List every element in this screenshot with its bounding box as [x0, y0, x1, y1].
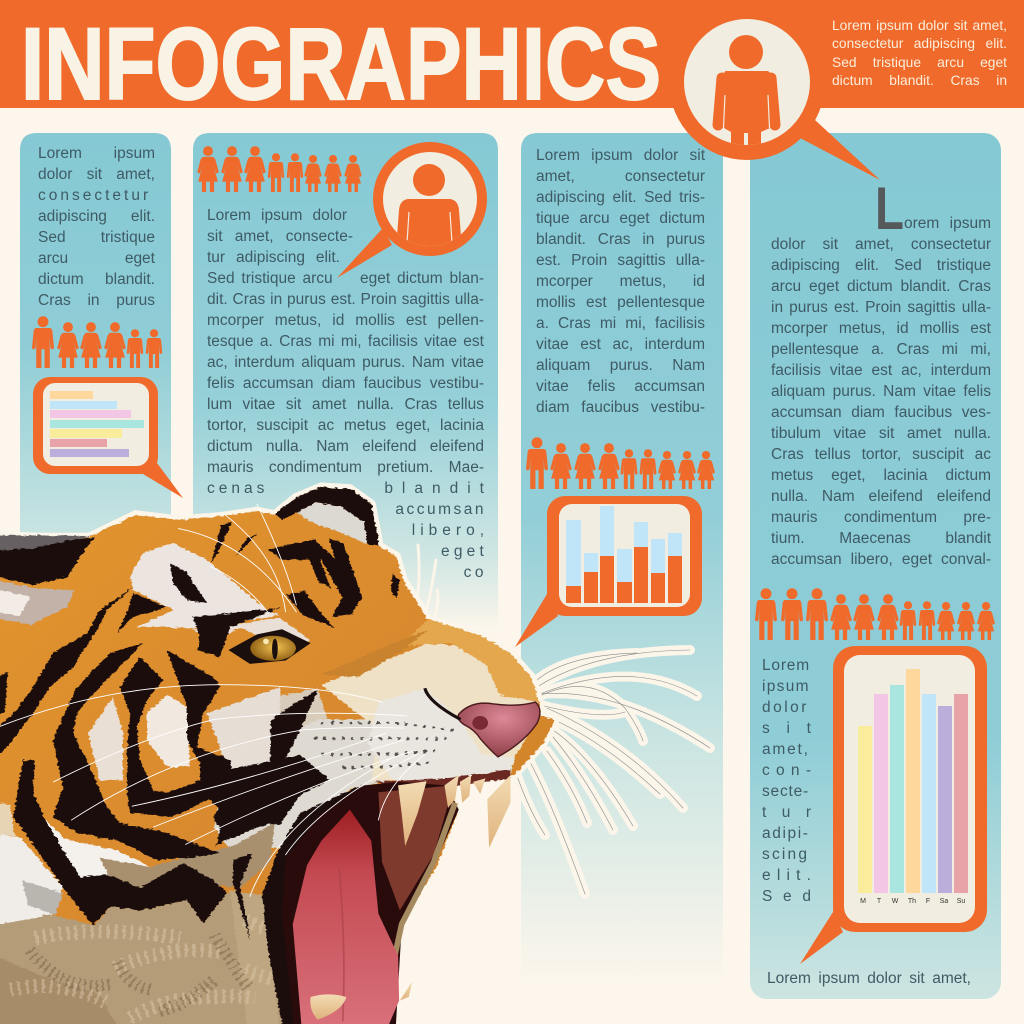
black face stripes — [0, 563, 362, 1024]
text block: second column: tesque a. Cras mi mi, facilisis vitae est — [207, 333, 484, 350]
text block: narrow column beside chart: t u r — [762, 804, 811, 821]
text block: third column: vitae est ac, interdum — [536, 336, 705, 353]
text block: third column: adipiscing elit. Sed tris- — [536, 189, 705, 206]
text block: third column: a. Cras mi mi, facilisis — [536, 315, 705, 332]
text block: second column: dictum nulla. Nam eleifend eleifend — [207, 438, 484, 455]
muzzle — [321, 643, 537, 785]
text block: fourth column: mauris condimentum pre- — [771, 509, 991, 526]
text block: fourth column: mcorper metus, id mollis est — [771, 320, 991, 337]
chart: stacked bars in speech bubble — [515, 496, 702, 647]
header band — [0, 0, 1024, 108]
text line: bottom of fourth column: Lorem ipsum dolor sit amet, — [767, 970, 971, 987]
text block: second column: Lorem ipsum dolor — [207, 207, 347, 224]
text block: fourth column: accumsan diam faucibus ves- — [771, 404, 991, 421]
text block: narrow column beside chart: Lorem — [762, 657, 810, 674]
text block: second column: tortor, suscipit ac metus eget, lacinia — [207, 417, 484, 434]
forehead stripes — [211, 522, 400, 627]
text block: narrow column beside chart: secte- — [762, 783, 809, 800]
cheek white patches — [88, 697, 123, 780]
text block: fourth column: dolor sit amet, consectetur — [771, 236, 991, 253]
text block: second column: felis accumsan diam faucibus vestibu- — [207, 375, 484, 392]
ear right — [275, 487, 379, 546]
text block: narrow column beside chart — [762, 657, 811, 905]
chart: weekly bars in speech bubble: Sa — [940, 898, 948, 905]
text block: fourth column — [771, 215, 991, 568]
text block: second column: mauris condimentum pretium. Mae- — [207, 459, 484, 476]
chart: weekly bars in speech bubble: T — [877, 898, 882, 905]
text block: second column: dit. Cras in purus est. Proin sagittis ulla- — [207, 291, 484, 308]
panel: fourth column — [750, 133, 1001, 999]
face whiskers — [0, 504, 425, 896]
text block: narrow column beside chart: S e d — [762, 888, 811, 905]
forehead white — [130, 543, 280, 628]
text block: fourth column: nulla. Nam eleifend eleifend — [771, 488, 991, 505]
text block: third column: tique arcu eget dictum — [536, 210, 705, 227]
text block: fourth column: metus eget, lacinia dictum — [771, 467, 991, 484]
right whiskers over panel — [517, 650, 710, 894]
jaw fur edge — [393, 803, 455, 966]
chart: weekly bars in speech bubble: F — [926, 898, 930, 905]
tiger halo outline — [0, 487, 555, 1024]
tan between stripes — [100, 822, 275, 890]
text block: third column: mollis est pellentesque — [536, 294, 705, 311]
neck — [0, 893, 305, 1024]
icon: header person speech bubble — [674, 19, 880, 180]
text block: third column — [536, 147, 705, 416]
eye — [228, 629, 311, 664]
text block: second column: libero, — [412, 522, 489, 539]
text block: second column: cenas — [207, 480, 268, 497]
text block: fourth column: adipiscing elit. Sed tristique — [771, 257, 991, 274]
panel: third column — [521, 133, 723, 985]
text block: fourth column: pellentesque a. Cras mi mi, — [771, 341, 991, 358]
header text: dictum blandit. Cras in — [832, 73, 1007, 88]
text block: left column — [38, 145, 155, 309]
panel: left column — [20, 133, 171, 535]
text block: second column: accumsan — [395, 501, 486, 518]
text block: third column: aliquam purus. Nam — [536, 357, 705, 374]
text block: second column: sit amet, consecte- — [207, 228, 353, 245]
text block: second column: eget — [441, 543, 488, 560]
text block: fourth column: aliquam purus. Nam vitae felis — [771, 383, 991, 400]
upper lip shadow — [375, 770, 511, 787]
text block: left column: Sed tristique — [38, 229, 155, 246]
chart: weekly bars in speech bubble: M — [860, 898, 866, 905]
white band upper — [43, 817, 150, 880]
icon: person speech bubble in second column — [337, 142, 487, 278]
text block: second column: lum vitae sit amet nulla. Cras tellus — [207, 396, 484, 413]
nose — [425, 688, 540, 757]
text block: left column: consectetur — [38, 187, 151, 204]
text block: fourth column: facilisis vitae est ac, interdum — [771, 362, 991, 379]
text block: fourth column: Cras tellus tortor, suscipit ac — [771, 446, 991, 463]
chart: weekly bars in speech bubble: W — [892, 898, 899, 905]
header text: Sed tristique arcu eget — [832, 55, 1007, 70]
face layers in page coordinates — [0, 535, 362, 1024]
text block: third column: Lorem ipsum dolor sit — [536, 147, 705, 164]
text block: fourth column: tium. Maecenas blandit — [771, 530, 991, 547]
text block: narrow column beside chart: c o n - — [762, 762, 811, 779]
drop cap letter: L — [875, 175, 904, 242]
icon row: people third column — [526, 437, 715, 489]
title: INFOGRAPHICS — [21, 7, 661, 121]
text block: third column: amet, consectetur — [536, 168, 705, 185]
text block: left column: adipiscing elit. — [38, 208, 155, 225]
text block: narrow column beside chart: s i t — [762, 720, 811, 737]
chart: weekly bars in speech bubble: Th — [908, 898, 916, 905]
text block: second column: ac, interdum aliquam purus. Nam vitae — [207, 354, 484, 371]
text block: left column: arcu eget — [38, 250, 155, 267]
text block: narrow column beside chart: amet, — [762, 741, 810, 758]
mouth interior — [282, 782, 459, 1024]
text block: narrow column beside chart: e l i t . — [762, 867, 811, 884]
left cream fur — [0, 800, 15, 840]
text block: third column: est. Proin sagittis ulla- — [536, 252, 705, 269]
text block: fourth column: orem ipsum — [904, 215, 991, 232]
text block: second column: mcorper metus, id mollis est pellen- — [207, 312, 484, 329]
text block: left column: dolor sit amet, — [38, 166, 155, 183]
header text: consectetur adipiscing elit. — [832, 36, 1007, 51]
header text: Lorem ipsum dolor sit amet, — [832, 18, 1007, 33]
text block: fourth column: tibulum vitae sit amet nulla. — [771, 425, 991, 442]
text block: third column: vitae felis accumsan — [536, 378, 705, 395]
text block: narrow column beside chart: scing — [762, 846, 809, 863]
text block: second column: co — [464, 564, 487, 581]
chart: weekly bars in speech bubble — [800, 646, 987, 964]
text block: left column: dictum blandit. — [38, 271, 155, 288]
chart: horizontal bars in speech bubble — [33, 377, 183, 498]
tiger fur layers — [0, 487, 555, 1024]
text block: fourth column: accumsan libero, eget conval- — [771, 551, 991, 568]
muzzle dots — [314, 723, 453, 768]
text block: fourth column: in purus est. Proin sagittis ulla- — [771, 299, 991, 316]
text block: second column: Sed tristique arcu eget dictum blan- — [207, 270, 484, 287]
icon row: people left column — [32, 316, 162, 368]
icon row: people second column — [197, 146, 362, 192]
forehead whiskers over panel — [412, 545, 438, 620]
panel: second column — [193, 133, 498, 630]
text block: narrow column beside chart: adipi- — [762, 825, 810, 842]
text block: third column: mcorper metus, id — [536, 273, 705, 290]
icon row: people fourth column — [755, 588, 995, 640]
text block: second column: blandit — [384, 480, 493, 497]
text block: narrow column beside chart: dolor — [762, 699, 809, 716]
white band lower — [0, 833, 63, 930]
left ear — [0, 538, 95, 585]
text block: second column: tur adipiscing elit. — [207, 249, 340, 266]
tongue — [293, 810, 399, 1024]
neck fur dark streaks — [30, 935, 250, 1012]
text block: third column: blandit. Cras in purus — [536, 231, 705, 248]
text block: second column — [207, 207, 493, 581]
neck fur light streaks — [10, 920, 278, 1018]
text block: third column: diam faucibus vestibu- — [536, 399, 705, 416]
text block: left column: Cras in purus — [38, 292, 155, 309]
teeth — [310, 775, 511, 1020]
upper muzzle side — [236, 688, 328, 754]
header text — [832, 18, 1007, 88]
text block: narrow column beside chart: ipsum — [762, 678, 810, 695]
chart: weekly bars in speech bubble: Su — [957, 898, 965, 905]
text block: fourth column: arcu eget dictum blandit. Cras — [771, 278, 991, 295]
head base — [0, 487, 555, 1024]
text block: left column: Lorem ipsum — [38, 145, 155, 162]
